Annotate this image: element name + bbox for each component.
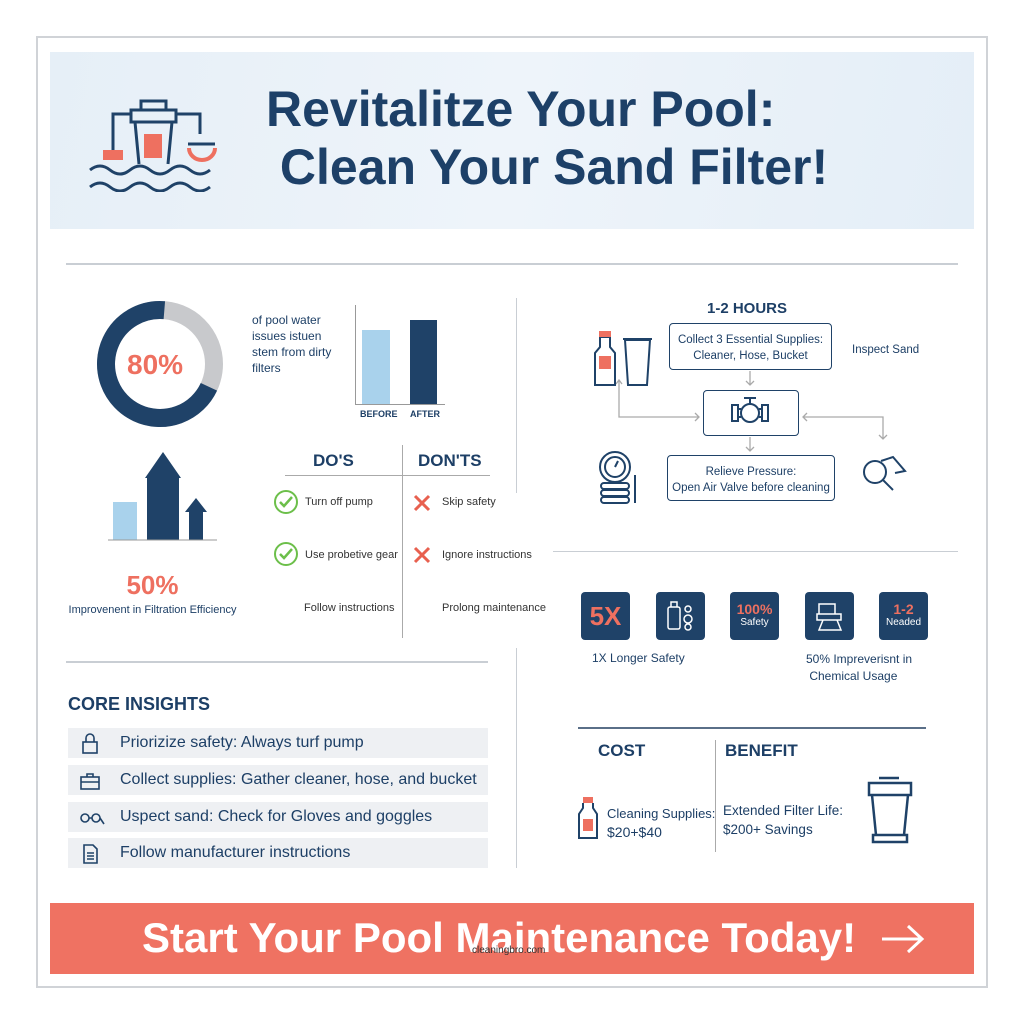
call to action banner	[50, 903, 974, 974]
icon: filter	[89, 100, 217, 192]
cost vs benefit: $200+ Savings	[723, 822, 813, 837]
call to action banner: cleaningbro.com	[472, 945, 545, 956]
text: Uspect sand: Check for Gloves and goggles	[120, 808, 432, 825]
text: Priorizize safety: Always turf pump	[120, 734, 364, 751]
title: Clean Your Sand Filter!	[280, 139, 828, 195]
donut chart	[97, 301, 223, 427]
process flow	[594, 300, 919, 504]
call to action banner: Start Your Pool Maintenance Today!	[142, 914, 856, 961]
process flow: 1-2 HOURS	[707, 300, 787, 317]
do's and don'ts: DO'S	[313, 451, 354, 470]
stat text: stem from dirty	[252, 345, 331, 359]
bar chart before/after	[355, 305, 445, 419]
stat text: of pool water	[252, 313, 321, 327]
do's and don'ts: Use probetive gear	[305, 549, 398, 561]
stat tiles: Neaded	[886, 617, 921, 628]
stat tiles: Safety	[740, 617, 769, 628]
process flow: Open Air Valve before cleaning	[672, 482, 830, 494]
cost vs benefit: BENEFIT	[725, 741, 798, 760]
process flow: Inspect Sand	[852, 344, 919, 356]
stat tiles	[581, 592, 928, 683]
stat tiles: 1-2	[893, 601, 914, 617]
stat text	[252, 313, 332, 375]
stat tiles: 5X	[590, 601, 621, 631]
cost vs benefit: Extended Filter Life:	[723, 803, 843, 818]
50% stat: 50%	[126, 570, 179, 600]
bar chart before/after: AFTER	[410, 409, 440, 419]
do's and don'ts: Turn off pump	[305, 496, 373, 508]
stat tiles: Chemical Usage	[809, 669, 897, 683]
process flow: Cleaner, Hose, Bucket	[693, 350, 808, 362]
do's and don'ts: DON'TS	[418, 451, 482, 470]
stat tiles: 100%	[737, 601, 772, 617]
do's and don'ts: Ignore instructions	[442, 549, 532, 561]
do's and don'ts: Prolong maintenance	[442, 602, 546, 614]
50% stat	[69, 570, 236, 616]
process flow: Collect 3 Essential Supplies:	[678, 334, 823, 346]
cost vs benefit: Cleaning Supplies:	[607, 806, 715, 821]
stat tiles: 50% Impreverisnt in	[806, 652, 912, 666]
cost vs benefit: COST	[598, 741, 645, 760]
title: Revitalitze Your Pool:	[266, 81, 775, 137]
arrows chart	[108, 452, 217, 540]
text: Follow manufacturer instructions	[120, 844, 350, 861]
stat tiles: 1X Longer Safety	[592, 651, 685, 665]
header band	[50, 52, 974, 229]
bar chart before/after: BEFORE	[360, 409, 398, 419]
stat text: issues istuen	[252, 329, 321, 343]
cost vs benefit: $20+$40	[607, 824, 662, 840]
title	[266, 81, 828, 195]
cost vs benefit	[578, 740, 912, 852]
text: Collect supplies: Gather cleaner, hose, and bucket	[120, 771, 477, 788]
process flow: Relieve Pressure:	[706, 466, 796, 478]
do's and don'ts	[274, 445, 546, 638]
do's and don'ts: Skip safety	[442, 496, 496, 508]
50% stat: Improvenent in Filtration Efficiency	[69, 604, 236, 616]
core insights: CORE INSIGHTS	[68, 694, 210, 714]
stat text: filters	[252, 361, 281, 375]
do's and don'ts: Follow instructions	[304, 602, 394, 614]
donut chart: 80%	[127, 349, 183, 380]
